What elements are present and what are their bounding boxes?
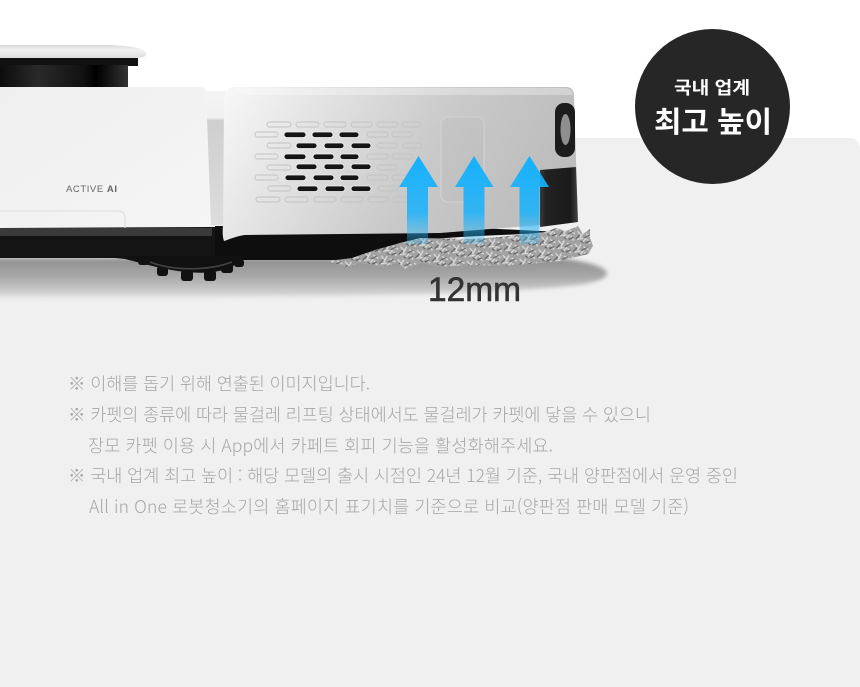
front sensor: [555, 103, 575, 157]
label: ACTIVE AI: ACTIVE AI: [66, 184, 117, 195]
vent outlines: [255, 122, 422, 202]
badge: industry highest: 최고 높이: [654, 106, 772, 139]
note 3 line 2: All in One 로봇청소기의 홈페이지 표기치를 기준으로 비교(양판점 판매 모델 기준): [89, 494, 689, 519]
note 3 line 1: ※ 국내 업계 최고 높이 : 해당 모델의 출시 시점인 24년 12월 기준, 국내 양판점에서 운영 중인: [68, 463, 738, 488]
arrow 2: [455, 156, 494, 244]
background panel: [0, 138, 860, 687]
drive wheel: [95, 256, 246, 281]
note 2 line 2: 장모 카펫 이용 시 App에서 카페트 회피 기능을 활성화해주세요.: [88, 433, 553, 458]
arrows: lift direction: [399, 156, 549, 244]
height label: 12mm: [428, 271, 521, 309]
sensor lens: [560, 114, 570, 145]
gap between panels: [206, 91, 226, 225]
vent slots: [284, 132, 371, 192]
footnotes: [68, 371, 738, 519]
black front band: [540, 167, 578, 227]
right body panel: [223, 87, 578, 241]
side button: [441, 117, 484, 202]
black base: [0, 226, 560, 260]
badge: industry highest: 국내 업계: [674, 78, 750, 98]
note 2 line 1: ※ 카펫의 종류에 따라 물걸레 리프팅 상태에서도 물걸레가 카펫에 닿을 수 있으니: [68, 402, 651, 427]
robot floor shadow: [0, 258, 607, 299]
mop pad: [328, 226, 593, 269]
badge: industry highest: [635, 29, 790, 184]
robot vacuum illustration: [0, 45, 593, 281]
left body panel: [0, 87, 211, 228]
sensor tower: [0, 45, 146, 87]
arrow 1: [399, 156, 438, 244]
arrow 3: [510, 156, 549, 244]
note 1: ※ 이해를 돕기 위해 연출된 이미지입니다.: [68, 371, 370, 396]
